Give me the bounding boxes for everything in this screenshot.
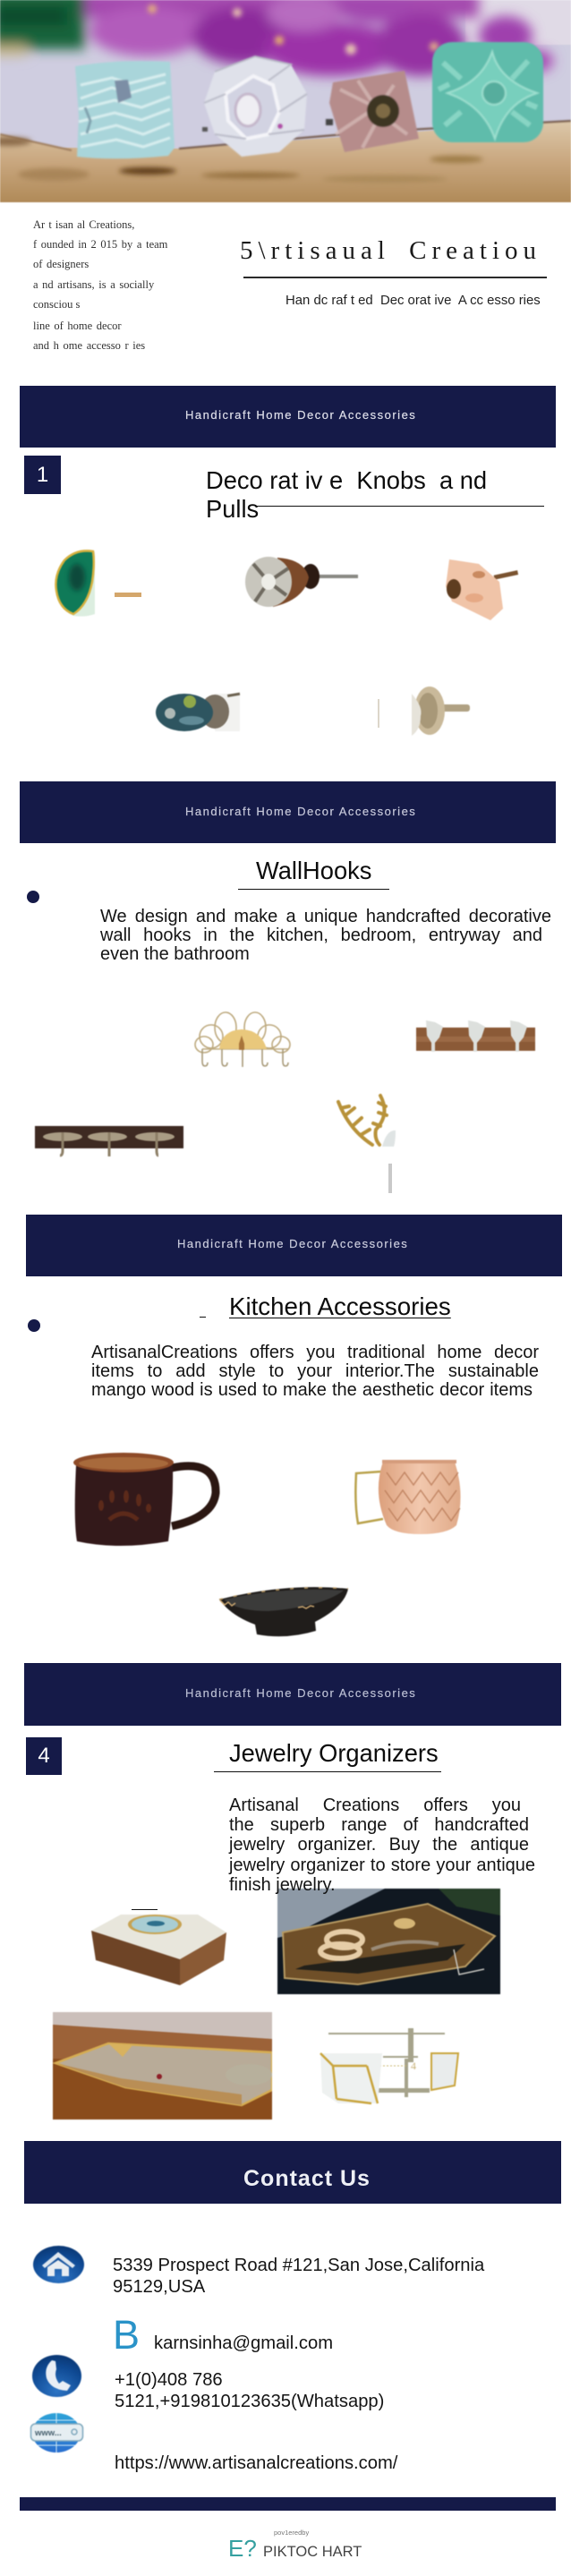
intro text block: and h ome accesso r ies bbox=[33, 339, 145, 352]
intro text block: consciou s bbox=[33, 298, 80, 311]
heading: decorative knobs and pulls bbox=[206, 466, 544, 523]
badge 1 bbox=[24, 456, 61, 494]
banner 3 bbox=[26, 1215, 562, 1276]
badge 1: 1 bbox=[37, 463, 48, 487]
phone numbers bbox=[115, 2370, 384, 2411]
grey bar bbox=[388, 1164, 392, 1193]
banner: contact us: Contact Us bbox=[243, 2166, 371, 2191]
knob: green agate bbox=[54, 549, 96, 617]
piktochart wordmark: PIKTOC HART bbox=[263, 2544, 362, 2560]
icon: email letter B: B bbox=[113, 2312, 140, 2358]
address: 95129,USA bbox=[113, 2277, 205, 2297]
paragraph: jewelry organizers: the superb range of handcrafted bbox=[229, 1815, 529, 1835]
paragraph: jewelry organizers: jewelry organizer. Buy the antique bbox=[229, 1835, 529, 1855]
banner: contact us bbox=[24, 2141, 561, 2204]
badge 4: 4 bbox=[38, 1744, 50, 1768]
paragraph: kitchen accessories: ArtisanalCreations offers you traditional home decor bbox=[91, 1343, 539, 1362]
website url: https://www.artisanalcreations.com/ bbox=[115, 2453, 397, 2473]
banner 1 bbox=[20, 386, 556, 448]
heading: jewelry organizers: Jewelry Organizers bbox=[229, 1739, 439, 1767]
banner 2: Handicraft Home Decor Accessories bbox=[185, 805, 416, 818]
paragraph: kitchen accessories: mango wood is used to make the aesthetic decor items bbox=[91, 1380, 533, 1400]
hook: peacock bbox=[193, 1011, 292, 1068]
blue glass knob bbox=[75, 61, 175, 158]
photo: mirrored tray on wood table bbox=[52, 2012, 273, 2120]
icon: www globe bbox=[30, 2412, 84, 2453]
banner 4: Handicraft Home Decor Accessories bbox=[185, 1686, 416, 1700]
small rule bbox=[132, 1909, 158, 1910]
brand title: 5\rtisaual Creatiou bbox=[240, 236, 541, 265]
bowl: black with stitching bbox=[218, 1586, 349, 1638]
wooden box with agate bbox=[90, 1914, 227, 1986]
thin divider bbox=[378, 699, 379, 728]
hook: antlers bbox=[336, 1093, 396, 1147]
bracelet box and grey chart marks: 4 bbox=[411, 2060, 416, 2072]
paragraph: jewelry organizers: jewelry organizer to store your antique bbox=[229, 1855, 535, 1875]
paragraph: wall hooks bbox=[100, 907, 551, 964]
hero photo: glass and ceramic knobs on wood bbox=[0, 0, 571, 203]
intro text block: line of home decor bbox=[33, 320, 122, 332]
bullet 1 bbox=[27, 891, 39, 903]
brand subtitle: Han dc raf t ed Dec orat ive A cc esso ries bbox=[286, 294, 541, 308]
intro text block: f ounded in 2 015 by a team bbox=[33, 238, 167, 251]
photo: glass tray on dark table bbox=[277, 1888, 501, 1995]
small dash bbox=[200, 1317, 206, 1318]
paragraph: wall hooks: even the bathroom bbox=[100, 944, 250, 964]
paragraph: wall hooks: We design and make a unique handcrafted decorative bbox=[100, 907, 551, 926]
piktochart logo mark: E? bbox=[228, 2535, 257, 2562]
teal ceramic knob bbox=[432, 42, 543, 142]
heading: decorative knobs and pulls: Pulls bbox=[206, 495, 259, 523]
knob: brass bbox=[412, 686, 471, 736]
paragraph: jewelry organizers bbox=[229, 1796, 535, 1895]
icon: phone bbox=[31, 2354, 82, 2398]
intro text block: a nd artisans, is a socially bbox=[33, 278, 154, 291]
footer bar bbox=[20, 2497, 556, 2511]
banner 3: Handicraft Home Decor Accessories bbox=[177, 1237, 408, 1250]
intro text block: Ar t isan al Creations, bbox=[33, 218, 134, 231]
heading: decorative knobs and pulls: Deco rat iv e Knobs a nd bbox=[206, 466, 487, 494]
paragraph: kitchen accessories bbox=[91, 1343, 539, 1400]
icon: house bbox=[32, 2245, 85, 2284]
intro text block: of designers bbox=[33, 258, 89, 270]
heading: wall hooks: WallHooks bbox=[256, 857, 371, 884]
phone numbers: 5121,+919810123635(Whatsapp) bbox=[115, 2392, 384, 2411]
knob: blue floral bbox=[155, 692, 241, 732]
address bbox=[113, 2256, 485, 2297]
email: karnsinha@gmail.com bbox=[154, 2333, 333, 2353]
knob: mother of pearl bbox=[245, 557, 359, 608]
badge 4 bbox=[26, 1737, 62, 1775]
banner 2 bbox=[20, 781, 556, 843]
mug: dark brown bbox=[72, 1452, 220, 1547]
address: 5339 Prospect Road #121,San Jose,California bbox=[113, 2256, 484, 2275]
phone numbers: +1(0)408 786 bbox=[115, 2370, 223, 2390]
knob: pink stone bbox=[446, 559, 519, 621]
hook: roosters on wood bbox=[415, 1020, 536, 1053]
bracelet box and grey chart marks bbox=[319, 2027, 460, 2105]
paragraph: wall hooks: wall hooks in the kitchen, bedroom, entryway and bbox=[100, 925, 542, 945]
icon: www globe: www... bbox=[34, 2428, 62, 2438]
hook: dragonflies on dark board bbox=[34, 1125, 184, 1157]
powered by: pov1eredby bbox=[274, 2529, 309, 2537]
bullet 2 bbox=[28, 1319, 40, 1332]
mug: copper bbox=[354, 1459, 462, 1534]
heading: kitchen accessories: Kitchen Accessories bbox=[229, 1292, 451, 1320]
pink glass knob bbox=[326, 71, 419, 152]
intro text block bbox=[33, 218, 168, 352]
banner 4 bbox=[24, 1663, 561, 1726]
paragraph: jewelry organizers: finish jewelry. bbox=[229, 1875, 336, 1895]
paragraph: kitchen accessories: items to add style to your interior.The sustainable bbox=[91, 1361, 539, 1381]
banner 1: Handicraft Home Decor Accessories bbox=[185, 408, 416, 422]
crystal knob bbox=[202, 56, 307, 157]
paragraph: jewelry organizers: Artisanal Creations offers you bbox=[229, 1796, 521, 1815]
small tan bar bbox=[115, 593, 141, 597]
